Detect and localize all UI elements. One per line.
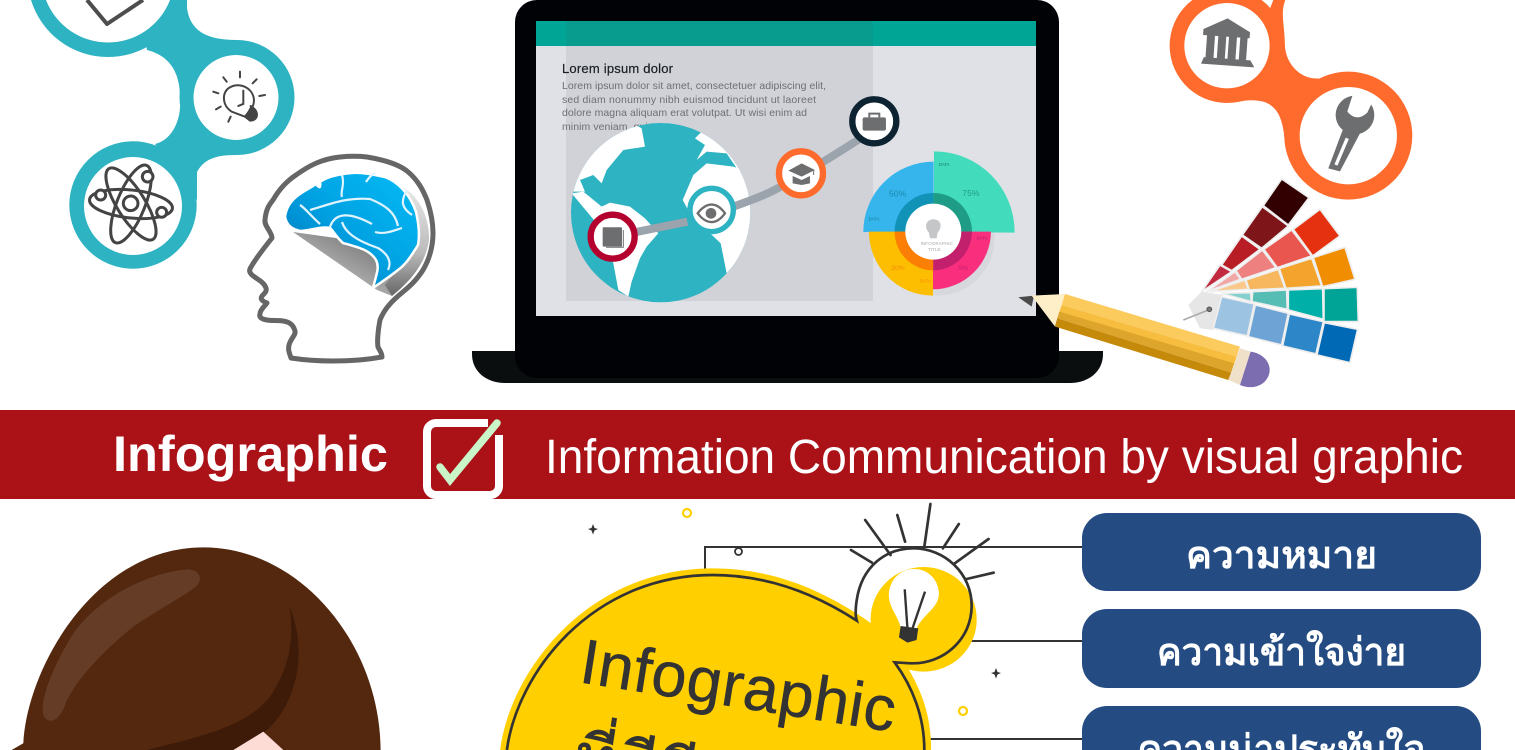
band heading: Infographic <box>113 426 388 482</box>
laptop <box>472 0 1103 383</box>
screen paragraph: Lorem ipsum dolor sit amet, consectetuer adipiscing elit, <box>562 80 826 92</box>
node: graduation cap <box>779 151 823 195</box>
decorative dots <box>588 509 1001 715</box>
node: eye <box>690 188 733 232</box>
icon: bulb <box>889 569 939 643</box>
node: briefcase <box>852 99 896 143</box>
screen header <box>536 21 1036 46</box>
box: meaning <box>1082 513 1481 591</box>
box: meaning: ความหมาย <box>1186 535 1377 577</box>
chart labels: 75% <box>962 188 980 198</box>
chart labels: 50% <box>889 189 907 199</box>
orange icon chain <box>1170 0 1412 200</box>
globe <box>560 122 757 302</box>
chart labels: DATA <box>939 162 950 167</box>
icon: light bulb <box>213 72 265 122</box>
character hair <box>12 547 381 750</box>
icon: checkbox <box>427 423 499 495</box>
head with brain <box>250 156 433 361</box>
icon: atom <box>88 160 174 248</box>
connector line <box>613 137 863 237</box>
icon: chart bulb <box>926 219 941 238</box>
pencil <box>1018 294 1270 387</box>
connector lines <box>705 547 1082 739</box>
screen paragraph <box>562 80 826 133</box>
face <box>233 732 283 750</box>
box: easy to understand <box>1082 609 1481 688</box>
brain <box>285 173 419 288</box>
chart labels: 5% <box>958 265 968 272</box>
label boxes <box>1082 513 1481 750</box>
icon: light rays <box>851 504 994 579</box>
colour swatch fan <box>1183 179 1358 363</box>
node: book <box>591 215 635 259</box>
icon: bank <box>1201 17 1258 67</box>
chart labels: INFOGRAPHIC <box>921 241 954 246</box>
bubble outline <box>507 548 972 750</box>
brain rim shadow <box>385 187 429 296</box>
radial chart <box>863 151 1015 296</box>
chart labels <box>869 162 988 284</box>
screen title: Lorem ipsum dolor <box>562 61 674 76</box>
bubble heading: Infographic <box>576 627 901 746</box>
darker panel <box>566 21 873 301</box>
box: easy to understand: ความเข้าใจง่าย <box>1157 630 1406 674</box>
title band <box>0 410 1515 499</box>
box: impressive <box>1082 706 1481 750</box>
screen paragraph: dolore magna aliquam erat volutpat. Ut wisi enim ad <box>562 107 807 119</box>
hair shadow <box>147 607 299 750</box>
chart labels: DATA <box>977 236 988 241</box>
icon: check mark <box>87 0 143 24</box>
chart labels: DATA <box>869 217 880 222</box>
yellow thought bubble <box>500 504 994 750</box>
band subtitle: Information Communication by visual graphic <box>545 431 1463 484</box>
screen paragraph: sed diam nonummy nibh euismod tincidunt ut laoreet <box>562 94 816 106</box>
chart labels: DATA <box>920 279 931 284</box>
chart labels: TITLE <box>928 247 941 252</box>
laptop body <box>515 0 1059 378</box>
screen paragraph: minim veniam, quis <box>562 121 653 133</box>
teal icon chain <box>31 0 294 269</box>
icon: wrench <box>1328 94 1374 171</box>
screen <box>536 21 1036 316</box>
brain shadow <box>293 232 408 296</box>
hair highlight <box>43 569 200 721</box>
chart labels: 20% <box>891 265 905 272</box>
head outline <box>250 156 433 361</box>
laptop base <box>472 351 1103 383</box>
